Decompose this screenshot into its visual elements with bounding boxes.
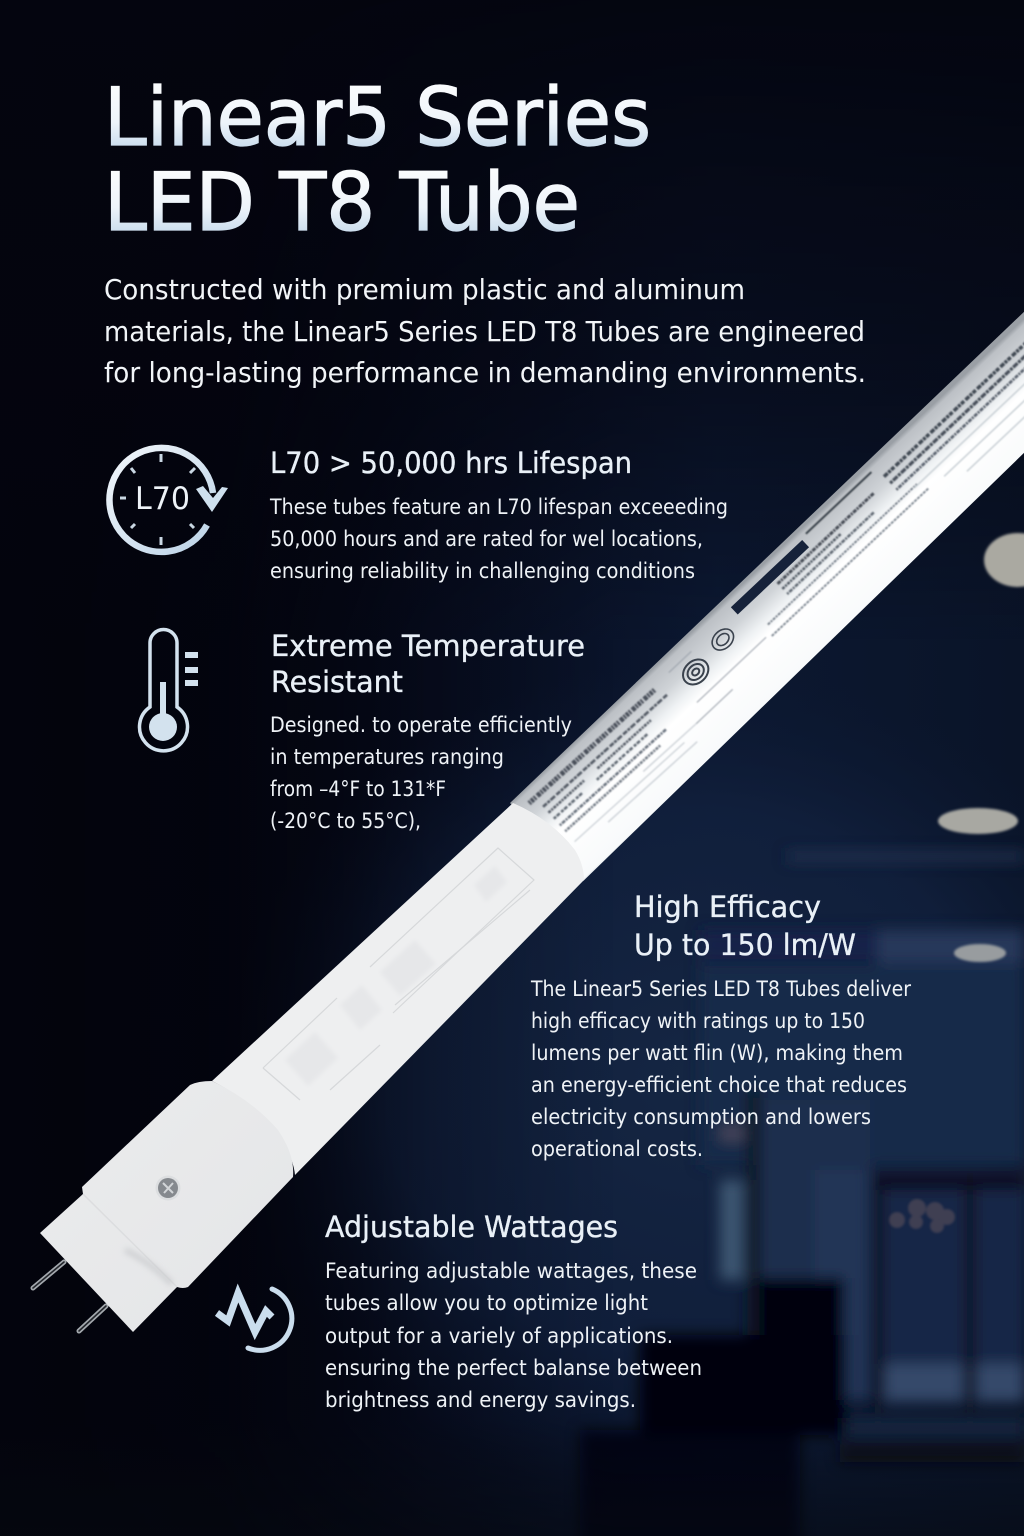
feature: lifespan: These tubes feature an L70 lifespan exceeeding xyxy=(269,495,728,520)
intro paragraph xyxy=(104,273,866,389)
feature: efficacy: lumens per watt flin (W), making them xyxy=(531,1041,903,1066)
feature: efficacy: high efficacy with ratings up to 150 xyxy=(531,1009,865,1034)
feature: temperature: Extreme Temperature xyxy=(271,629,585,663)
feature: efficacy xyxy=(530,890,911,1162)
feature: wattages: brightness and energy savings. xyxy=(325,1388,636,1413)
title: LED T8 Tube xyxy=(104,156,580,249)
driver sleeve embossed marks xyxy=(263,848,534,1100)
feature: efficacy: High Efficacy xyxy=(634,890,821,924)
icon: L70 clock with arrow: L70 xyxy=(135,481,190,517)
feature: wattages: Adjustable Wattages xyxy=(325,1210,618,1244)
feature: efficacy: operational costs. xyxy=(531,1137,703,1162)
intro paragraph: Constructed with premium plastic and aluminum xyxy=(104,273,745,306)
feature: efficacy: an energy-efficient choice that reduces xyxy=(531,1073,907,1098)
feature: temperature: in temperatures ranging xyxy=(270,745,504,770)
intro paragraph: materials, the Linear5 Series LED T8 Tubes are engineered xyxy=(104,315,865,348)
feature: wattages: output for a variely of applications. xyxy=(325,1324,673,1349)
feature: lifespan: ensuring reliability in challenging conditions xyxy=(270,559,695,584)
feature: lifespan: L70 > 50,000 hrs Lifespan xyxy=(270,446,632,480)
title: Linear5 Series xyxy=(104,71,651,164)
feature: lifespan: 50,000 hours and are rated for wel locations, xyxy=(270,527,703,552)
icon: L70 clock with arrow xyxy=(109,448,228,552)
feature: temperature: Designed. to operate efficiently xyxy=(270,713,572,738)
LED tube: white driver sleeve xyxy=(212,803,584,1175)
icon: thermometer xyxy=(140,630,198,751)
screw xyxy=(156,1176,180,1200)
icon: adjustable wattage bolt xyxy=(217,1289,292,1350)
feature: lifespan xyxy=(269,446,728,584)
feature: wattages: ensuring the perfect balanse between xyxy=(325,1356,702,1381)
feature: wattages: Featuring adjustable wattages, these xyxy=(325,1259,697,1284)
LED tube: lit lens with printed label xyxy=(506,209,1024,881)
feature: temperature: Resistant xyxy=(271,665,403,699)
feature: wattages xyxy=(325,1210,702,1413)
pin: upper contact xyxy=(33,1262,64,1288)
end cap with screw xyxy=(40,1081,293,1332)
feature: temperature: from –4°F to 131*F xyxy=(270,777,446,802)
feature: efficacy: electricity consumption and lowers xyxy=(531,1105,871,1130)
feature: wattages: tubes allow you to optimize light xyxy=(325,1291,648,1316)
feature: temperature xyxy=(270,629,585,834)
feature: efficacy: Up to 150 lm/W xyxy=(634,928,856,962)
feature: efficacy: The Linear5 Series LED T8 Tubes deliver xyxy=(530,977,911,1002)
title xyxy=(104,71,651,249)
intro paragraph: for long-lasting performance in demanding environments. xyxy=(104,356,866,389)
feature: temperature: (-20°C to 55°C), xyxy=(270,809,421,834)
pin: lower contact xyxy=(79,1306,106,1331)
